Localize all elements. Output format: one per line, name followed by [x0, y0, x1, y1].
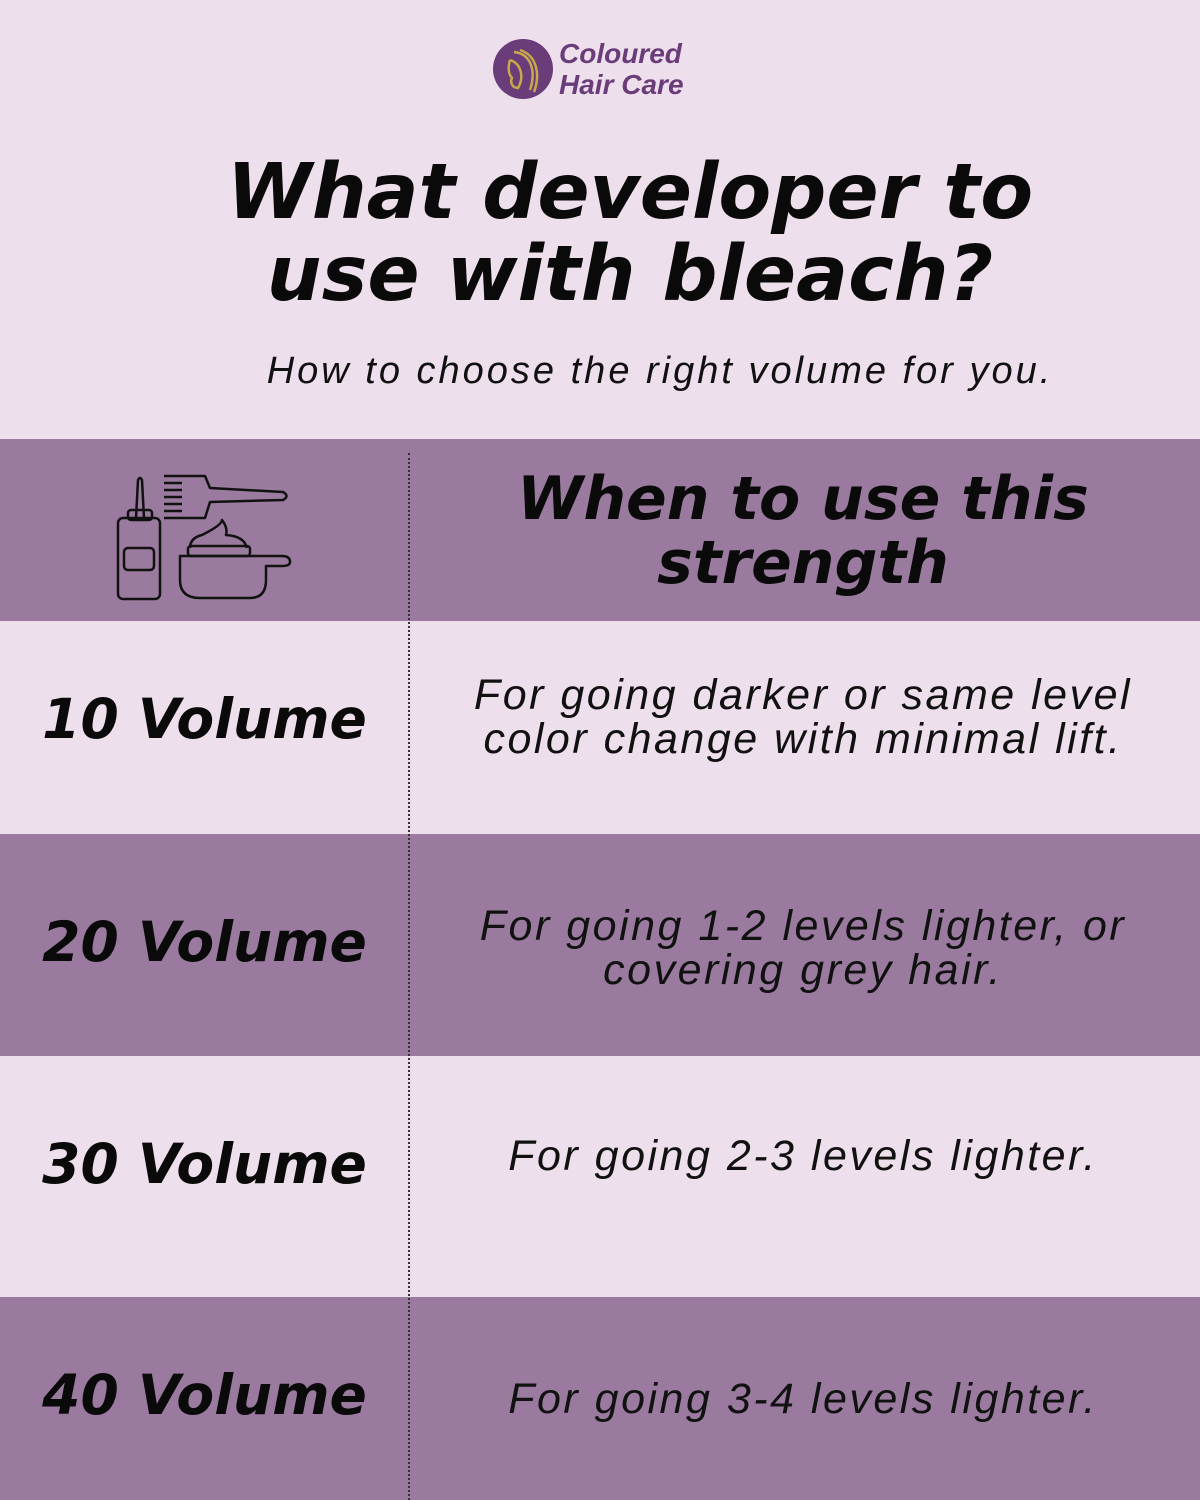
row 30 — [42, 1132, 1098, 1196]
title: use with bleach? — [267, 230, 993, 319]
row 10: color change with minimal lift. — [483, 715, 1123, 763]
row 40: For going 3-4 levels lighter. — [508, 1375, 1098, 1423]
row 20: covering grey hair. — [603, 946, 1003, 994]
row 20: For going 1-2 levels lighter, or — [480, 902, 1126, 950]
row 20: 20 Volume — [42, 910, 367, 974]
row 40 — [0, 1297, 1200, 1500]
logo: Hair Care — [559, 69, 684, 100]
header text: strength — [657, 528, 949, 598]
logo — [493, 38, 684, 100]
row 10: For going darker or same level — [474, 671, 1132, 719]
title — [227, 148, 1033, 319]
header row — [0, 439, 1200, 621]
header text — [517, 464, 1089, 598]
row 30: For going 2-3 levels lighter. — [508, 1132, 1098, 1180]
row 40: 40 Volume — [42, 1363, 367, 1427]
logo: Coloured — [559, 38, 682, 69]
row 10 — [42, 671, 1132, 763]
title: What developer to — [227, 148, 1033, 237]
row 10: 10 Volume — [42, 687, 367, 751]
row 20 — [0, 834, 1200, 1056]
row 30: 30 Volume — [42, 1132, 367, 1196]
icon: bottle, brush, bowl — [116, 474, 292, 600]
header text: When to use this — [517, 464, 1089, 534]
subtitle: How to choose the right volume for you. — [267, 350, 1053, 392]
